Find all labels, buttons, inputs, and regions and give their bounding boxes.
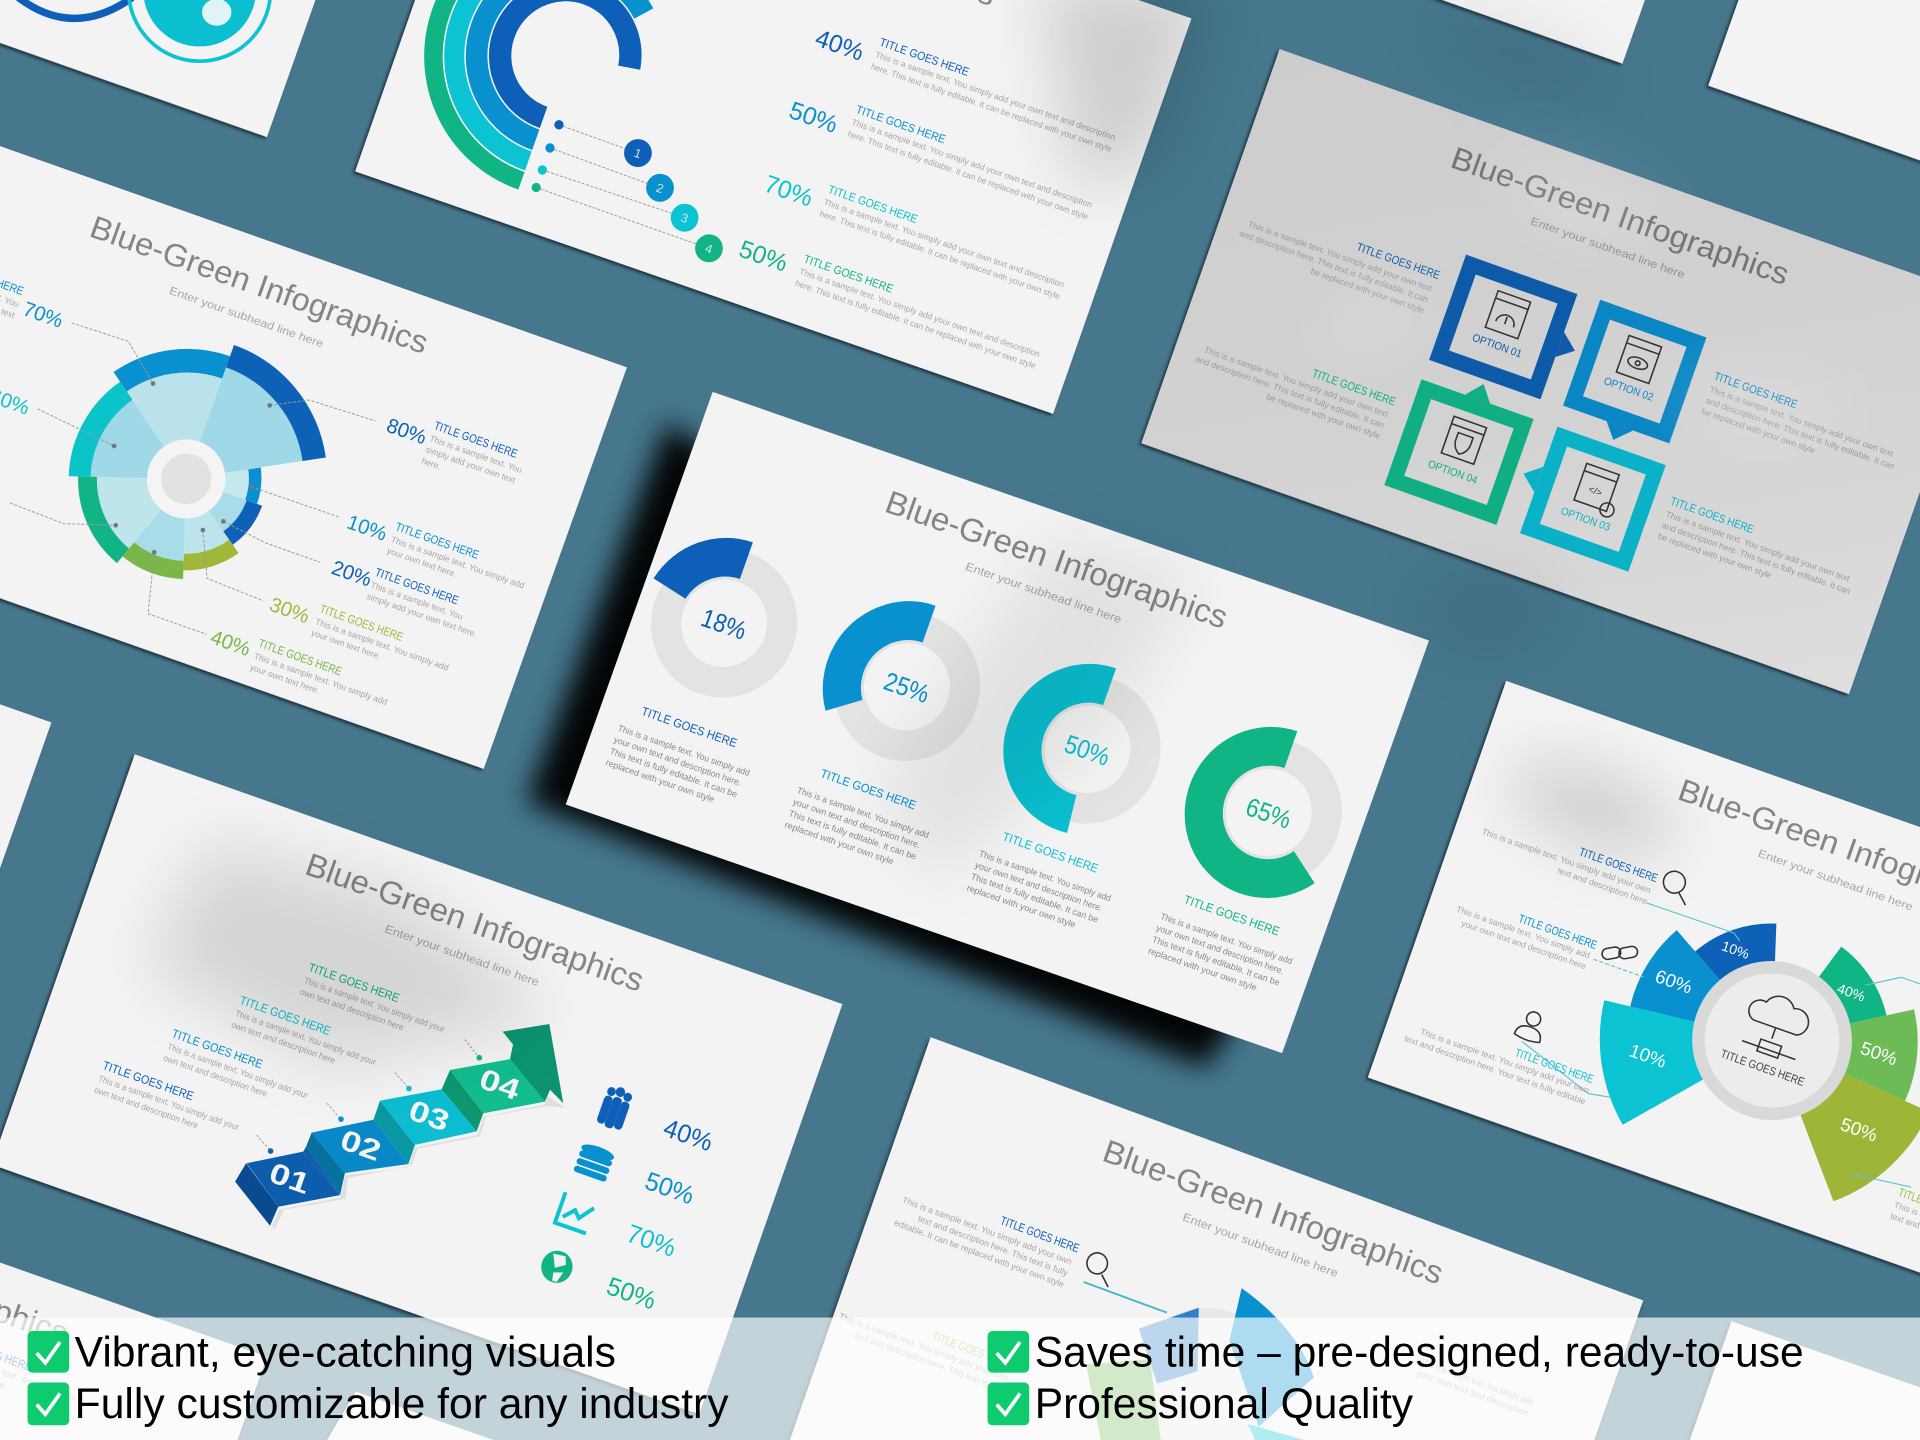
icon: check 4 <box>988 1382 1029 1425</box>
text blocks: TITLE GOES HERE <box>802 254 895 296</box>
caption 3: TITLE GOES HERE <box>1001 829 1100 876</box>
slide fragment: top-left circles <box>0 0 408 137</box>
percent labels: 40% <box>812 25 867 67</box>
text blocks: simply add your own text <box>424 444 517 485</box>
panel: donut slide (centre) <box>566 392 1429 1053</box>
step numbers: 02 <box>336 1124 385 1168</box>
caption 1: TITLE GOES HERE <box>639 704 739 750</box>
faint caption left: This is a sample text. You simply add your own <box>838 1311 1010 1383</box>
option 02 box <box>1565 310 1696 455</box>
step captions: TITLE GOES HERE <box>170 1026 265 1071</box>
caption 3: your own text and description here. <box>974 860 1104 913</box>
feature text 1: Vibrant, eye-catching visuals <box>75 1329 616 1376</box>
text blocks: here. This text is fully editable. It can be replaced with your own style <box>870 61 1113 154</box>
sector values: 10% <box>1627 1040 1669 1072</box>
panel: steps slide <box>0 754 842 1414</box>
caption 1: This is a sample text. You simply add <box>617 723 751 778</box>
step numbers: 04 <box>475 1063 524 1107</box>
text blocks: This is a sample text. You simply add your own text <box>1708 384 1895 459</box>
title: Blue-Green Infographics <box>301 846 649 999</box>
option 02 box: OPTION 02 <box>1602 375 1655 404</box>
concentric ring chart <box>397 0 733 224</box>
percent labels: 70% <box>761 171 816 212</box>
text blocks: This is a sample text. You simply add <box>253 651 389 707</box>
text blocks: TITLE GOES HERE <box>878 37 971 79</box>
percent labels: 10% <box>344 512 390 546</box>
step captions: own text and description here <box>299 986 405 1033</box>
sector values: 60% <box>1653 965 1695 998</box>
icon: magnifier <box>1658 868 1695 905</box>
slide fragment: far top right <box>1708 0 1920 336</box>
icon: chain link <box>1598 935 1642 971</box>
subtitle: Enter your subhead line here <box>1529 215 1686 281</box>
text blocks: This is a sample text. You simply add your own text <box>1247 219 1434 294</box>
text blocks <box>794 37 1122 371</box>
text blocks: TITLE GOES HERE <box>432 419 519 461</box>
centre slide drop shadow <box>527 422 1261 1068</box>
percent labels: 50% <box>641 1167 698 1210</box>
caption 4: replaced with your own style <box>1147 946 1258 993</box>
caption 2: your own text and description here. <box>792 796 922 850</box>
text blocks: here. This text is fully editable. It can be replaced with your own style <box>818 208 1062 301</box>
caption: TITLE GOES HERE <box>999 1213 1081 1256</box>
option 04 box <box>1394 367 1532 515</box>
text blocks: your own text here. <box>386 545 458 579</box>
caption: text and description here. This text is fully <box>917 1213 1070 1278</box>
caption 4: your own text and description here. <box>1155 923 1285 976</box>
panel: sunburst slide <box>0 118 627 769</box>
caption 4: This text is fully editable. It can be <box>1151 934 1281 988</box>
icon: globe <box>537 1246 577 1287</box>
text blocks: TITLE GOES HERE <box>373 566 460 607</box>
centre badge: TITLE GOES HERE <box>1719 1047 1806 1089</box>
caption 3 <box>965 824 1121 938</box>
text blocks: here. This text is fully editable. It can be replaced with your own style <box>794 278 1038 371</box>
percent labels: 50% <box>735 236 791 278</box>
caption 3: This is a sample text. You simply add <box>978 848 1113 903</box>
text blocks: TITLE GOES HERE <box>1712 370 1799 411</box>
caption <box>893 1179 1081 1290</box>
option 03 box: </> <box>1587 484 1603 498</box>
icon: check 1 <box>28 1331 69 1373</box>
numbered markers: 2 <box>654 181 665 196</box>
title: Blue-Green Infographics <box>1447 140 1794 292</box>
icon: database <box>573 1141 616 1182</box>
text blocks: and description here. This text is fully editable. It can <box>1194 354 1386 430</box>
donut 25%: 25% <box>880 667 933 709</box>
option 01 box: OPTION 01 <box>1471 332 1523 360</box>
option 03 box <box>1507 428 1656 562</box>
sunburst chart <box>0 269 396 689</box>
subtitle: Enter your subhead line here <box>1181 1211 1339 1280</box>
caption 1 <box>604 699 760 812</box>
caption 4: This is a sample text. You simply add <box>1159 911 1294 966</box>
subtitle: Enter your subhead line here <box>168 285 325 350</box>
step captions: This is a sample text. You simply add your <box>97 1073 240 1132</box>
text blocks <box>1190 202 1906 607</box>
percent labels: 70% <box>20 298 66 333</box>
slide fragment: left middle <box>0 473 51 1129</box>
text blocks: be replaced with your own style <box>1309 266 1426 315</box>
sector values: 50% <box>1838 1113 1880 1146</box>
panel: bottom centre slide <box>790 1037 1643 1440</box>
panel: options slide <box>1141 49 1920 694</box>
percent labels <box>0 287 429 693</box>
caption 3: This text is fully editable. It can be <box>970 871 1100 925</box>
donut 25% <box>791 570 1023 804</box>
centre badge <box>1670 939 1874 1142</box>
text blocks: This is a sample text. You simply add <box>1455 904 1592 960</box>
caption 1: replaced with your own style <box>604 757 716 804</box>
text blocks: and description here. This text is fully editable. It can <box>1661 520 1852 596</box>
step numbers: 01 <box>265 1157 314 1201</box>
step captions: This is a sample text. You simply add your <box>303 975 446 1034</box>
subtitle: Enter your subhead line here <box>1756 848 1914 913</box>
faint caption left: TITLE GOES HERE <box>930 1329 1013 1371</box>
step connector dots <box>257 1040 482 1154</box>
pie chart fragment <box>1084 1282 1314 1440</box>
faint caption left: text and description here. This text is fully <box>853 1330 1007 1395</box>
donut 18%: 18% <box>697 604 750 646</box>
text blocks: TITLE GOES HERE <box>1513 1046 1595 1086</box>
caption 4: TITLE GOES HERE <box>1182 892 1282 939</box>
slide fragment: top right small <box>915 0 1763 64</box>
text blocks: TITLE GOES HERE <box>1577 845 1659 885</box>
text blocks: your own text here. <box>310 627 382 661</box>
connector lines <box>0 314 375 663</box>
percent labels: 50% <box>603 1272 659 1316</box>
sector values: 50% <box>1858 1037 1900 1069</box>
text blocks: text and description here <box>1556 865 1649 906</box>
step numbers: 03 <box>404 1094 453 1138</box>
caption 2: This text is fully editable. It can be <box>787 808 918 862</box>
text blocks: This is a sample text. You simply add your own text <box>1664 509 1852 584</box>
text blocks: This is a sample text. You simply add <box>314 616 450 673</box>
text blocks: text and description here. Your text is fully editable <box>1403 1033 1587 1107</box>
faint caption right: your own text and description <box>1415 1368 1530 1418</box>
caption 2: replaced with your own style <box>783 819 895 867</box>
text blocks: be replaced with your own style <box>1265 391 1382 441</box>
numbered markers: 3 <box>679 211 690 226</box>
option 01 box <box>1439 265 1590 397</box>
title: Blue-Green Infographics <box>881 483 1233 636</box>
text blocks: and description here. This text is fully editable. It can <box>1704 395 1896 471</box>
slide fragment: bottom right <box>1690 1321 1920 1440</box>
text blocks: This is a sample text. You simply add your own <box>1481 826 1653 895</box>
staircase arrow <box>235 1024 566 1229</box>
icon: check 3 <box>988 1331 1029 1373</box>
text blocks: This is a sample text. You simply add your own text and description <box>874 49 1117 142</box>
step captions <box>93 906 451 1197</box>
step captions: TITLE GOES HERE <box>238 993 333 1038</box>
step captions: own text and description here <box>230 1019 337 1065</box>
option 04 box: OPTION 04 <box>1426 458 1479 487</box>
icon: people <box>595 1083 635 1132</box>
text blocks: This is a sample text. You simply add your own <box>1419 1027 1591 1096</box>
percent labels: 40% <box>207 627 253 661</box>
percent labels: 50% <box>786 97 841 139</box>
text blocks: This is a sample text. You simply add <box>390 534 526 591</box>
percent labels <box>735 24 867 278</box>
sector values: 10% <box>1720 938 1752 962</box>
icon: cloud network <box>1737 987 1814 1064</box>
text blocks: TITLE GOES HERE <box>318 603 405 644</box>
caption: editable. It can be replaced with your own style <box>893 1217 1066 1289</box>
step captions: This is a sample text. You simply add your <box>234 1008 378 1067</box>
icon: person <box>1514 1008 1548 1044</box>
option 03 box: OPTION 03 <box>1559 505 1612 534</box>
numbered markers <box>527 111 749 266</box>
slide fragment: bottom wedge <box>327 1392 493 1440</box>
caption: This is a sample text. You simply add your own <box>901 1195 1074 1267</box>
caption 1: This text is fully editable. It can be <box>608 746 739 799</box>
caption 1: your own text and description here. <box>612 734 743 788</box>
panel: rings slide <box>355 0 1191 414</box>
text blocks: This is a sample text. You simply add your own text <box>1203 345 1390 419</box>
text blocks: TITLE GOES HERE <box>1517 912 1599 952</box>
title: Blue-Green Infographics <box>1098 1132 1448 1291</box>
text blocks: TITLE GOES HERE <box>854 104 947 146</box>
step numbers <box>265 1007 524 1257</box>
slide fragment: bottom left with title <box>0 1198 267 1440</box>
title: Blue-Green Infographics <box>86 209 433 361</box>
step captions: TITLE GOES HERE <box>101 1058 196 1103</box>
icon: magnifier <box>1081 1250 1118 1287</box>
text blocks: TITLE GOES HERE <box>257 637 344 678</box>
bottom translucent feature bar <box>0 1318 1920 1440</box>
percent labels <box>603 1113 716 1316</box>
faint caption right: This is a sample text. You simply add <box>1419 1356 1534 1407</box>
panel: pie slide <box>1366 681 1920 1334</box>
text blocks: here. This text is fully editable. It can be replaced with your own style <box>846 129 1090 221</box>
icon: chart <box>555 1192 597 1234</box>
step captions: This is a sample text. You simply add your <box>166 1041 310 1100</box>
donut 65% <box>1152 695 1386 930</box>
caption 4 <box>1147 887 1302 1001</box>
text blocks <box>0 243 567 748</box>
text blocks: This is a sample text. You simply add your own text and description <box>822 197 1066 290</box>
numbered markers: 4 <box>703 241 714 257</box>
percent labels: 80% <box>383 415 429 449</box>
step captions: own text and description here <box>93 1085 200 1131</box>
subtitle: Enter your subhead line here <box>964 561 1123 626</box>
caption 2: TITLE GOES HERE <box>819 766 918 812</box>
sector values <box>1627 920 1920 1146</box>
text blocks: This is a sample text. You simply add your own text and description <box>850 117 1094 210</box>
caption 2: This is a sample text. You simply add <box>796 785 930 840</box>
text blocks: your own text and description here <box>1460 918 1588 971</box>
percent labels: 40% <box>660 1114 716 1157</box>
numbered markers: 1 <box>632 146 643 161</box>
percent labels: 70% <box>623 1219 679 1263</box>
text blocks: TITLE GOES HERE <box>1310 367 1397 409</box>
step captions: own text and description here <box>162 1053 269 1099</box>
text blocks: your own text here. <box>249 662 321 696</box>
text blocks: TITLE GOES HERE <box>394 520 481 562</box>
percent labels: 20% <box>329 557 374 592</box>
subtitle: Enter your subhead line here <box>383 923 540 989</box>
text blocks <box>1401 811 1920 1253</box>
text blocks: This is a sample text. You <box>369 580 465 622</box>
donut 50% <box>996 657 1179 842</box>
caption 3: replaced with your own style <box>965 883 1077 930</box>
text blocks: This is a sample text. You <box>428 433 524 475</box>
faint caption left <box>834 1296 1016 1395</box>
text blocks: TITLE GOES HERE <box>1668 495 1756 536</box>
pie sectors <box>1547 816 1920 1265</box>
percent labels: 30% <box>266 594 312 628</box>
text blocks: be replaced with your own style <box>1701 406 1817 456</box>
text blocks: and description here. This text is fully editable. It can <box>1238 228 1430 304</box>
text blocks: TITLE GOES HERE <box>826 184 919 226</box>
text blocks: TITLE GOES HERE <box>1355 241 1442 282</box>
connector lines <box>1513 865 1920 1205</box>
soft leaf shadows over the scene <box>147 0 1849 1065</box>
donut 50%: 50% <box>1061 730 1113 772</box>
step captions: TITLE GOES HERE <box>307 960 401 1005</box>
icon: check 2 <box>28 1382 69 1425</box>
text blocks: be replaced with your own style <box>1657 531 1773 580</box>
caption 2 <box>783 761 939 875</box>
feature text 3: Saves time – pre-designed, ready-to-use <box>1035 1329 1804 1376</box>
donut 18% <box>624 523 824 724</box>
feature text 2: Fully customizable for any industry <box>75 1380 729 1427</box>
text blocks: This is a sample text. You simply add your own text and description <box>798 266 1042 359</box>
feature text 4: Professional Quality <box>1035 1380 1414 1427</box>
text blocks: simply add your own text here. <box>365 591 478 639</box>
donut 65%: 65% <box>1242 793 1295 835</box>
sector values: 40% <box>1835 980 1867 1004</box>
text blocks: here. <box>420 455 442 471</box>
